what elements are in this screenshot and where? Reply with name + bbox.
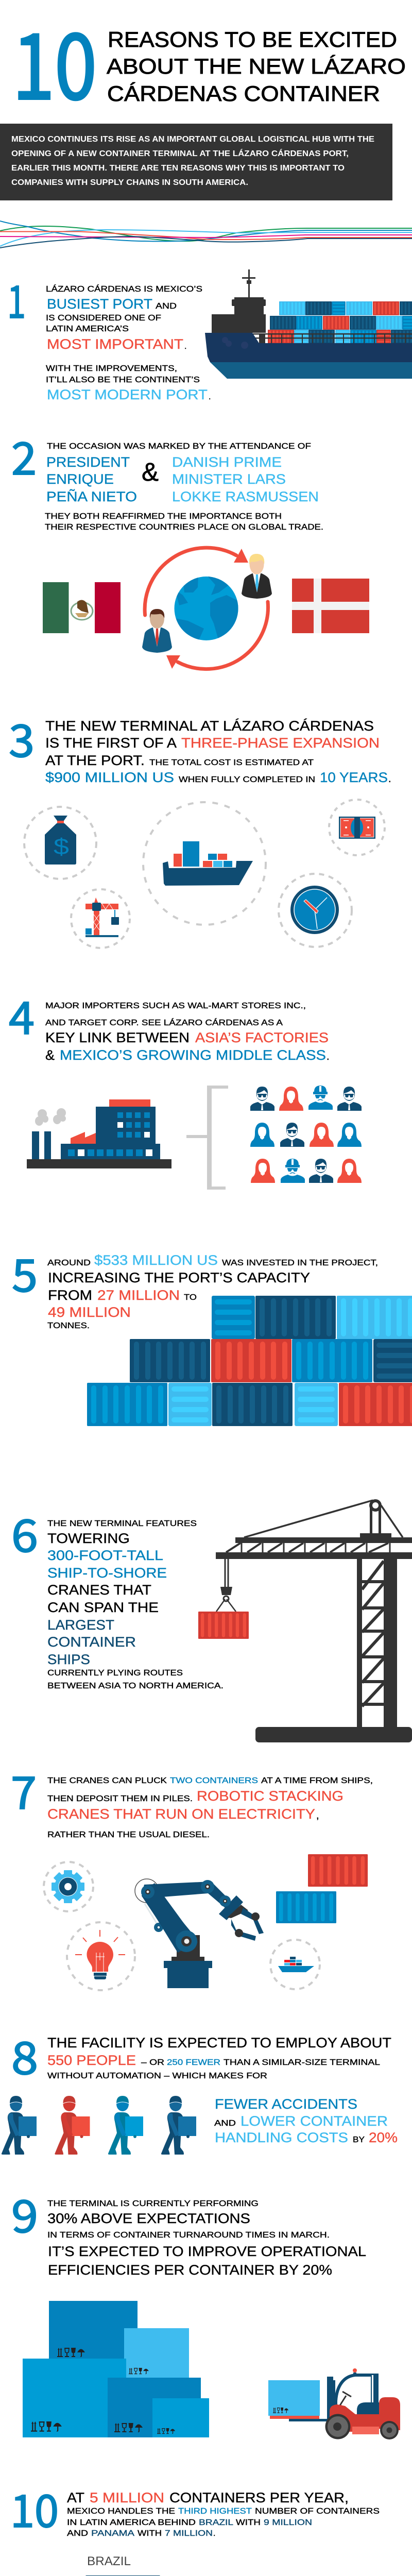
section 1 text: . xyxy=(209,393,211,401)
number 3: 3 xyxy=(9,705,35,770)
title text: REASONS TO BE EXCITED xyxy=(108,27,397,52)
section 10 text: NUMBER OF CONTAINERS xyxy=(255,2507,380,2516)
section 6 text: BETWEEN ASIA TO NORTH AMERICA. xyxy=(47,1682,224,1690)
number 6: 6 xyxy=(11,1500,38,1565)
section 2 text: PEÑA NIETO xyxy=(46,488,137,504)
icon: blue container xyxy=(276,1891,336,1923)
icon: banknote xyxy=(329,800,385,855)
number 7: 7 xyxy=(11,1757,37,1822)
section 5 text: INCREASING THE PORT’S CAPACITY xyxy=(48,1270,310,1285)
icon: money bag xyxy=(24,807,96,879)
section 10 text: 9 MILLION xyxy=(264,2518,312,2527)
icon: money bag: $ xyxy=(54,834,69,859)
section 10 text: . xyxy=(213,2529,215,2538)
section 5 text: AROUND xyxy=(47,1259,91,1267)
icon: red container xyxy=(308,1854,368,1887)
section 7 xyxy=(11,1757,373,1990)
number 5: 5 xyxy=(12,1240,38,1305)
callout: fewer accidents: AND xyxy=(214,2119,236,2128)
section 6 text: SHIP-TO-SHORE xyxy=(47,1565,167,1581)
section 8 text: 550 PEOPLE xyxy=(47,2053,136,2068)
section 8 xyxy=(2,2023,398,2155)
section 1 text: LÁZARO CÁRDENAS IS MEXICO’S xyxy=(46,284,202,294)
section 3 text: WHEN FULLY COMPLETED IN xyxy=(179,775,315,784)
section 3 text: . xyxy=(388,773,391,785)
section 6 text: TOWERING xyxy=(47,1531,130,1546)
section 4 xyxy=(9,982,362,1190)
icon: cargo ship xyxy=(143,802,266,925)
section 2 text: THE OCCASION WAS MARKED BY THE ATTENDANCE OF xyxy=(47,442,311,451)
section 6 text: CURRENTLY PLYING ROUTES xyxy=(47,1669,183,1677)
section 8 text: 250 FEWER xyxy=(167,2058,220,2067)
container stack xyxy=(87,1296,412,1426)
people grid xyxy=(250,1086,362,1183)
icon: gear xyxy=(44,1862,93,1911)
section 2 text xyxy=(45,442,323,532)
section 3 text: THE NEW TERMINAL AT LÁZARO CÁRDENAS xyxy=(45,718,374,734)
section 10 text: IN LATIN AMERICA BEHIND xyxy=(67,2518,196,2527)
icon: light bulb xyxy=(67,1922,135,1990)
section 2 text: MINISTER LARS xyxy=(172,471,286,487)
icon: forklift xyxy=(268,2368,400,2439)
section 5 text: 27 MILLION xyxy=(97,1287,180,1303)
section 10 text: AND xyxy=(67,2529,88,2538)
section 3 text: THREE-PHASE EXPANSION xyxy=(181,735,380,751)
icon: worker navy xyxy=(2,2096,37,2155)
label: Brazil: BRAZIL xyxy=(87,2554,131,2568)
icon: clock xyxy=(279,874,352,947)
section 7 text: , xyxy=(316,1810,319,1821)
section 5 text: WAS INVESTED IN THE PROJECT, xyxy=(222,1259,378,1267)
section 10 text: PANAMA xyxy=(91,2529,134,2538)
title text: ABOUT THE NEW LÁZARO xyxy=(107,54,406,78)
section 2 text: PRESIDENT xyxy=(46,454,130,470)
section 2 text: & xyxy=(142,457,159,486)
section 9 text: 30% ABOVE EXPECTATIONS xyxy=(47,2211,250,2226)
icon: Danish prime minister xyxy=(242,554,272,599)
icon: gantry crane xyxy=(198,1499,412,1742)
arrow: bottom arc xyxy=(166,602,268,669)
section 1 text: MOST MODERN PORT xyxy=(47,387,208,402)
section 10 text: THIRD HIGHEST xyxy=(178,2507,252,2516)
section 3 text: AT THE PORT. xyxy=(45,753,145,768)
section 10 text: BRAZIL xyxy=(199,2518,233,2527)
section 6 text xyxy=(47,1519,224,1690)
section 2 text: LOKKE RASMUSSEN xyxy=(172,489,319,504)
section 7 text: THEN DEPOSIT THEM IN PILES. xyxy=(47,1794,193,1803)
number 8: 8 xyxy=(11,2023,38,2088)
icon: flag of Denmark xyxy=(292,579,369,633)
callout: fewer accidents: HANDLING COSTS xyxy=(215,2130,348,2145)
wave lines top xyxy=(0,221,412,248)
icon: tower crane xyxy=(71,889,130,948)
section 9 text: EFFICIENCIES PER CONTAINER BY 20% xyxy=(48,2262,332,2278)
section 9 xyxy=(11,2181,400,2439)
section 8 text: THE FACILITY IS EXPECTED TO EMPLOY ABOUT xyxy=(47,2035,391,2050)
section 10 text: 7 MILLION xyxy=(165,2529,213,2538)
icon: container ship xyxy=(205,269,412,379)
callout: fewer accidents: FEWER ACCIDENTS xyxy=(215,2096,357,2112)
section 5 xyxy=(12,1240,412,1426)
bracket xyxy=(186,1086,228,1190)
section 3 text xyxy=(45,718,391,785)
section 10 text: WITH xyxy=(236,2518,261,2527)
section 3 xyxy=(9,705,391,948)
title text: CÁRDENAS CONTAINER xyxy=(107,81,380,106)
section 2 text: THEY BOTH REAFFIRMED THE IMPORTANCE BOTH xyxy=(45,512,282,521)
section 6 text: CAN SPAN THE xyxy=(47,1600,159,1615)
section 5 text: 49 MILLION xyxy=(48,1304,131,1320)
section 6 text: 300-FOOT-TALL xyxy=(47,1548,163,1563)
section 3 text: 10 YEARS xyxy=(320,770,388,785)
section 9 text: IN TERMS OF CONTAINER TURNAROUND TIMES IN MARCH. xyxy=(47,2231,330,2240)
section 7 text: CRANES THAT RUN ON ELECTRICITY xyxy=(47,1806,315,1822)
panel: intro: COMPANIES WITH SUPPLY CHAINS IN SOUTH AMERICA. xyxy=(11,178,248,187)
section 1 text: AND xyxy=(156,302,177,311)
icon: stacked boxes xyxy=(23,2301,209,2437)
callout: fewer accidents: 20% xyxy=(369,2130,398,2145)
section 5 text xyxy=(47,1252,378,1330)
section 4 text: . xyxy=(327,1051,330,1062)
section 6 text: SHIPS xyxy=(47,1652,90,1667)
callout: fewer accidents: BY xyxy=(353,2136,365,2144)
section 6 text: THE NEW TERMINAL FEATURES xyxy=(47,1519,197,1528)
number 1: 1 xyxy=(7,266,26,331)
section 5 text: $533 MILLION US xyxy=(94,1252,218,1268)
section 5 text: TO xyxy=(184,1293,197,1302)
panel: intro: MEXICO CONTINUES ITS RISE AS AN IMPORTANT GLOBAL LOGISTICAL HUB WITH THE xyxy=(11,135,374,144)
section 4 text: KEY LINK BETWEEN xyxy=(45,1030,190,1045)
section 10 text: MEXICO HANDLES THE xyxy=(67,2507,175,2516)
callout: fewer accidents: LOWER CONTAINER xyxy=(241,2113,388,2129)
icon: small ship xyxy=(270,1940,320,1989)
section 6 text: LARGEST xyxy=(47,1617,114,1633)
section 10 xyxy=(10,2476,380,2576)
section 1 text: LATIN AMERICA’S xyxy=(46,325,129,333)
section 10 text: WITH xyxy=(138,2529,162,2538)
section 2 text: THEIR RESPECTIVE COUNTRIES PLACE ON GLOBAL TRADE. xyxy=(45,523,323,532)
section 9 text: THE TERMINAL IS CURRENTLY PERFORMING xyxy=(47,2199,259,2208)
arrow: top arc xyxy=(145,548,248,615)
bar chart: containers by country xyxy=(85,2554,329,2576)
section 3 text: $900 MILLION US xyxy=(45,770,174,785)
section 8 text: – OR xyxy=(141,2058,164,2067)
icon: Mexican president xyxy=(142,609,172,653)
icon: worker teal xyxy=(108,2096,143,2155)
section 1 text xyxy=(46,284,211,402)
icon: globe xyxy=(174,577,238,640)
bar: Brazil containers xyxy=(85,2575,160,2576)
section 1 text: IS CONSIDERED ONE OF xyxy=(46,314,161,323)
panel: intro: OPENING OF A NEW CONTAINER TERMINAL AT THE LÁZARO CÁRDENAS PORT, xyxy=(11,149,349,158)
section 7 text: TWO CONTAINERS xyxy=(170,1776,258,1785)
section 7 text: ROBOTIC STACKING xyxy=(197,1788,344,1804)
section 1 text: IT’LL ALSO BE THE CONTINENT’S xyxy=(46,376,200,384)
section 6 text: CRANES THAT xyxy=(47,1582,151,1598)
section 9 text: IT’S EXPECTED TO IMPROVE OPERATIONAL xyxy=(48,2244,366,2259)
icon: worker red xyxy=(55,2096,90,2155)
section 10 text: AT xyxy=(67,2490,84,2505)
section 4 text: MEXICO’S GROWING MIDDLE CLASS xyxy=(60,1047,326,1063)
section 8 text: THAN A SIMILAR-SIZE TERMINAL xyxy=(224,2058,380,2067)
section 4 text xyxy=(45,1002,330,1063)
icon: factory xyxy=(27,1099,171,1168)
section 7 text: AT A TIME FROM SHIPS, xyxy=(261,1776,373,1785)
section 1 text: WITH THE IMPROVEMENTS, xyxy=(46,364,177,373)
number 9: 9 xyxy=(11,2181,38,2246)
section 10 text: CONTAINERS PER YEAR, xyxy=(169,2490,349,2505)
section 1 text: BUSIEST PORT xyxy=(47,296,152,312)
section 2 text: DANISH PRIME xyxy=(172,454,282,470)
section 4 text: MAJOR IMPORTERS SUCH AS WAL-MART STORES INC., xyxy=(45,1002,306,1010)
section 4 text: AND TARGET CORP. SEE LÁZARO CÁRDENAS AS A xyxy=(45,1018,283,1027)
section 7 text: RATHER THAN THE USUAL DIESEL. xyxy=(47,1831,210,1839)
icon: flag of Mexico xyxy=(43,582,121,633)
title text xyxy=(107,27,406,106)
callout: fewer accidents xyxy=(214,2096,398,2145)
section 5 text: FROM xyxy=(48,1287,92,1303)
section 1 text: MOST IMPORTANT xyxy=(47,336,183,352)
icon: worker navy 2 xyxy=(161,2096,196,2155)
section 5 text: TONNES. xyxy=(47,1321,90,1330)
panel: intro xyxy=(0,124,392,200)
section 3 text: IS THE FIRST OF A xyxy=(45,735,177,751)
section 1 xyxy=(7,266,412,402)
section 6 xyxy=(11,1499,412,1742)
section 10 text xyxy=(67,2490,380,2538)
section 4 text: ASIA’S FACTORIES xyxy=(195,1030,329,1045)
section 6 text: CONTAINER xyxy=(47,1634,136,1650)
section 7 text xyxy=(47,1776,373,1839)
section 4 text: & xyxy=(45,1047,55,1063)
section 3 text: THE TOTAL COST IS ESTIMATED AT xyxy=(149,758,314,767)
number 10: 10 xyxy=(10,2476,59,2540)
section 2 text: ENRIQUE xyxy=(46,471,114,487)
number 2: 2 xyxy=(11,423,37,488)
section 8 text: WITHOUT AUTOMATION – WHICH MAKES FOR xyxy=(47,2072,267,2080)
number 4: 4 xyxy=(9,982,35,1047)
section 8 text xyxy=(47,2035,391,2080)
title xyxy=(12,0,406,125)
panel: intro: EARLIER THIS MONTH. THERE ARE TEN REASONS WHY THIS IS IMPORTANT TO xyxy=(11,164,345,173)
section 7 text: THE CRANES CAN PLUCK xyxy=(47,1776,167,1785)
section 9 text xyxy=(47,2199,366,2278)
section 2 xyxy=(11,423,369,669)
icon: robotic arm xyxy=(135,1879,264,1988)
section 10 text: 5 MILLION xyxy=(90,2490,164,2505)
section 1 text: . xyxy=(184,342,186,351)
